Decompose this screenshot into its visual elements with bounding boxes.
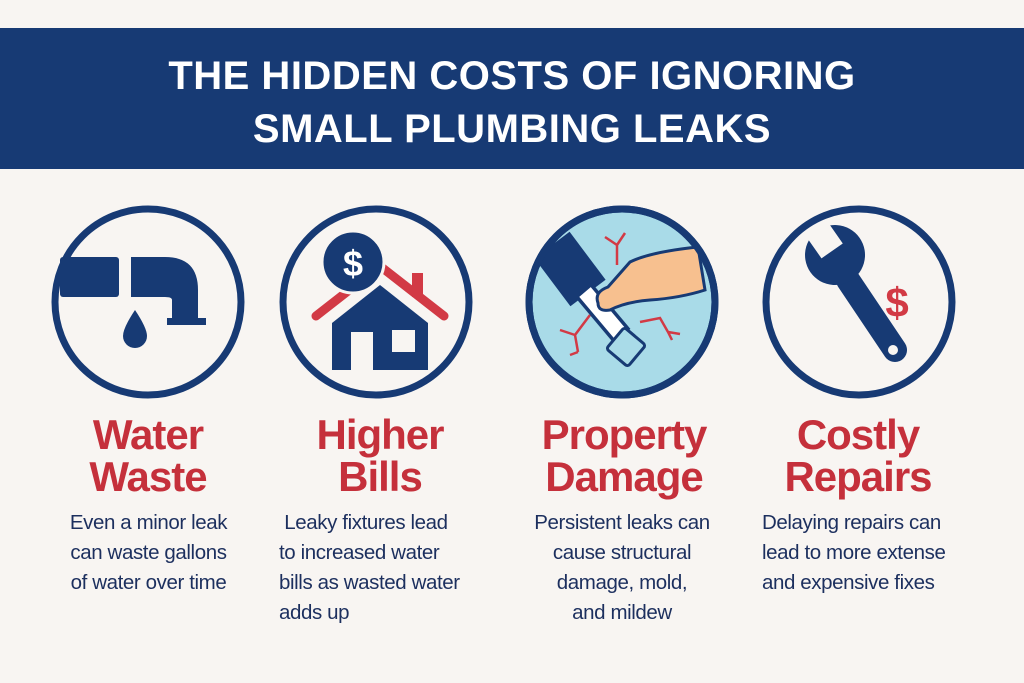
- text: water waste: [70, 511, 228, 594]
- text: water waste: can waste gallons: [70, 541, 227, 564]
- text: water waste: Even a minor leak: [70, 511, 227, 534]
- text: higher bills: [279, 511, 460, 624]
- heading: costly repairs: Repairs: [784, 453, 932, 500]
- heading: costly repairs: Costly: [797, 411, 919, 458]
- icon: property damage: [529, 209, 715, 395]
- heading: property damage: [542, 411, 708, 500]
- heading: higher bills: Bills: [338, 453, 422, 500]
- text: property damage: damage, mold,: [557, 571, 687, 594]
- text: higher bills: bills as wasted water: [279, 571, 460, 594]
- icons: [52, 206, 956, 398]
- icon: leaking pipe: [55, 209, 241, 395]
- icon: house with dollar: [283, 209, 469, 395]
- title banner: THE HIDDEN COSTS OF IGNORING: [168, 54, 856, 98]
- text: property damage: [534, 511, 710, 624]
- icon: house with dollar: $: [343, 243, 363, 284]
- icon: wrench with dollar: [766, 209, 952, 395]
- text: higher bills: adds up: [279, 601, 349, 624]
- heading: property damage: Property: [542, 411, 706, 458]
- text: higher bills: to increased water: [279, 541, 439, 564]
- text: costly repairs: [762, 511, 945, 594]
- heading: water waste: Waste: [89, 453, 207, 500]
- text: water waste: of water over time: [71, 571, 226, 594]
- heading: water waste: [89, 411, 207, 500]
- heading: water waste: Water: [93, 411, 203, 458]
- icon: wrench with dollar: $: [885, 279, 909, 326]
- title banner: [0, 28, 1024, 169]
- text: costly repairs: Delaying repairs can: [762, 511, 941, 534]
- heading: property damage: Damage: [545, 453, 703, 500]
- text: costly repairs: and expensive fixes: [762, 571, 934, 594]
- heading: higher bills: Higher: [316, 411, 444, 458]
- text: property damage: Persistent leaks can: [534, 511, 710, 534]
- text: property damage: and mildew: [572, 601, 672, 624]
- text: property damage: cause structural: [553, 541, 691, 564]
- heading: higher bills: [316, 411, 444, 500]
- title banner: SMALL PLUMBING LEAKS: [253, 107, 771, 151]
- text: costly repairs: lead to more extense: [762, 541, 945, 564]
- heading: costly repairs: [784, 411, 932, 500]
- text: higher bills: Leaky fixtures lead: [284, 511, 448, 534]
